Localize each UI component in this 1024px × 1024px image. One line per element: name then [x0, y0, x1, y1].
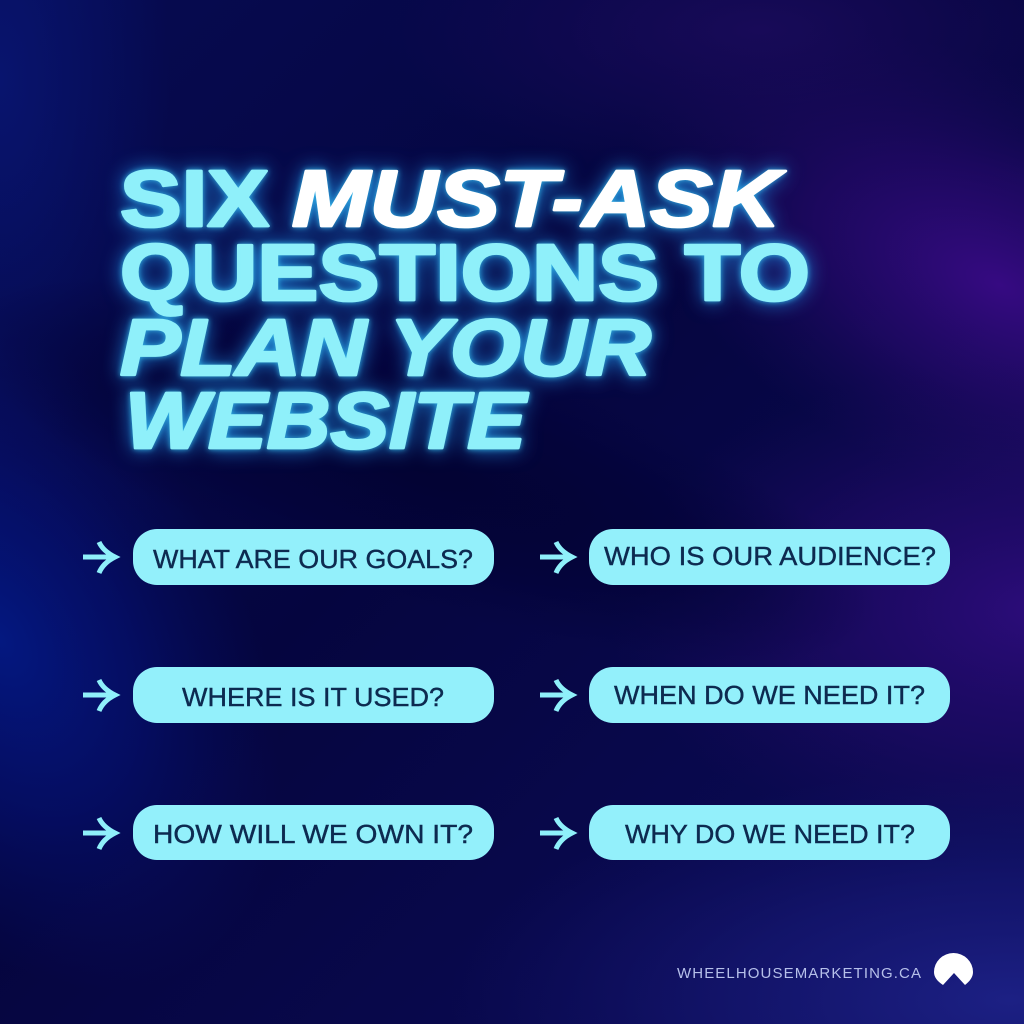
question: what are our goals: WHAT ARE OUR GOALS? — [153, 544, 473, 574]
arrow — [540, 542, 572, 573]
question: how will we own it — [83, 805, 494, 860]
arrow — [540, 818, 572, 849]
arrow — [83, 680, 115, 711]
title: PLAN YOUR — [120, 303, 651, 392]
title: MUST-ASK — [292, 154, 786, 243]
arrow — [540, 680, 572, 711]
question: how will we own it: HOW WILL WE OWN IT? — [153, 819, 473, 849]
icon: wheelhouse logo — [934, 953, 973, 985]
question: what are our goals — [83, 529, 494, 585]
footer website address: WHEELHOUSEMARKETING.CA — [677, 965, 921, 982]
question: when do we need it — [540, 667, 950, 723]
question: when do we need it: WHEN DO WE NEED IT? — [614, 680, 925, 710]
title — [120, 154, 810, 465]
question: why do we need it: WHY DO WE NEED IT? — [625, 819, 915, 849]
question: why do we need it — [540, 805, 950, 860]
title: QUESTIONS TO — [120, 228, 810, 317]
question: who is our audience — [540, 529, 950, 585]
question: who is our audience: WHO IS OUR AUDIENCE? — [604, 541, 936, 571]
arrow — [83, 542, 115, 573]
title: WEBSITE — [125, 376, 529, 465]
question: where is it used — [83, 667, 494, 723]
title: SIX — [120, 154, 269, 243]
arrow — [83, 818, 115, 849]
question: where is it used: WHERE IS IT USED? — [182, 682, 444, 712]
